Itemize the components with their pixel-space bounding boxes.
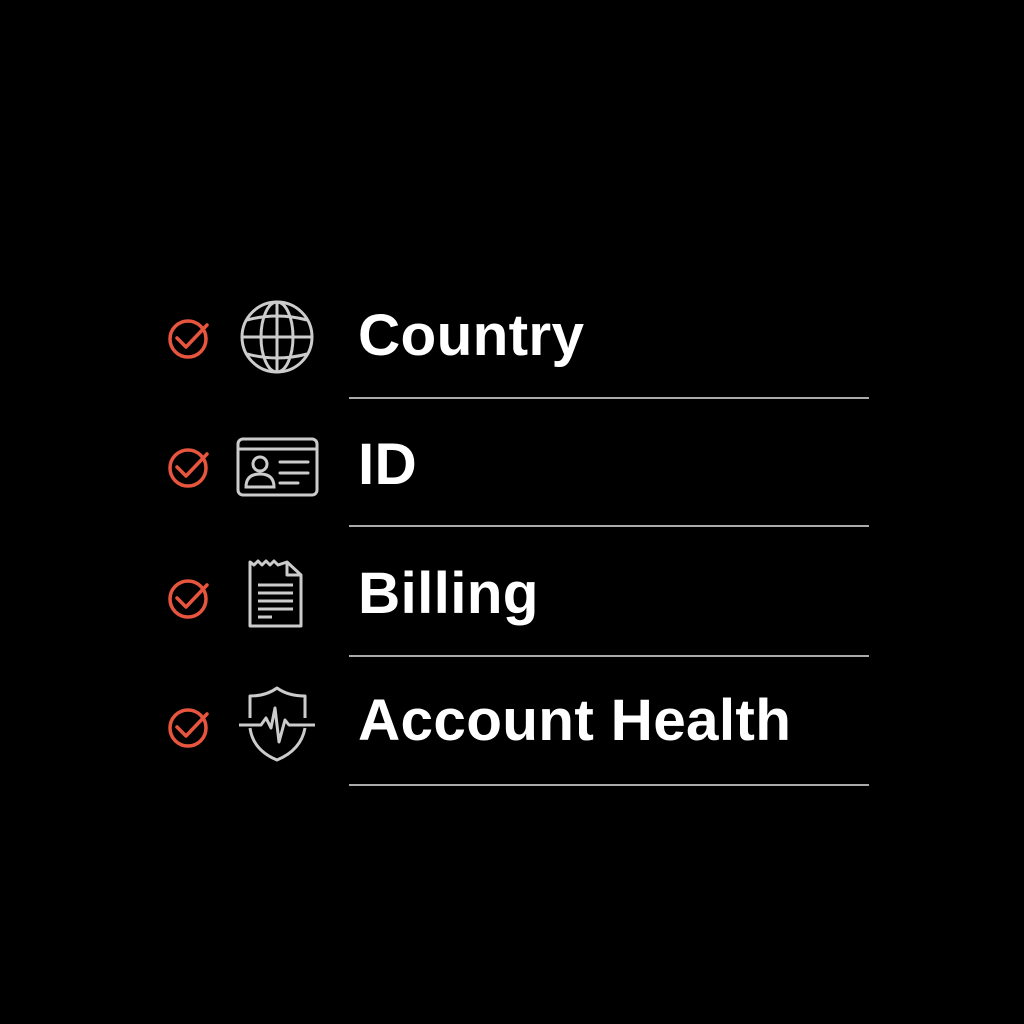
row: ID [170, 432, 417, 497]
icon: ID card [238, 439, 317, 495]
label: Account Health: Account Health [358, 688, 791, 753]
icon: globe [242, 302, 312, 372]
check icon: account health [170, 710, 207, 746]
check icon: billing [170, 581, 207, 617]
label: ID: ID [358, 432, 417, 497]
checklist [170, 302, 869, 785]
label: Country: Country [358, 303, 584, 368]
label: Billing: Billing [358, 561, 539, 626]
icon: document [250, 561, 301, 626]
icon: shield with pulse [239, 688, 315, 760]
row: country [170, 302, 584, 372]
row: billing [170, 561, 539, 626]
check icon: country [170, 321, 207, 357]
row: account health [170, 688, 791, 760]
check icon: ID [170, 450, 207, 486]
